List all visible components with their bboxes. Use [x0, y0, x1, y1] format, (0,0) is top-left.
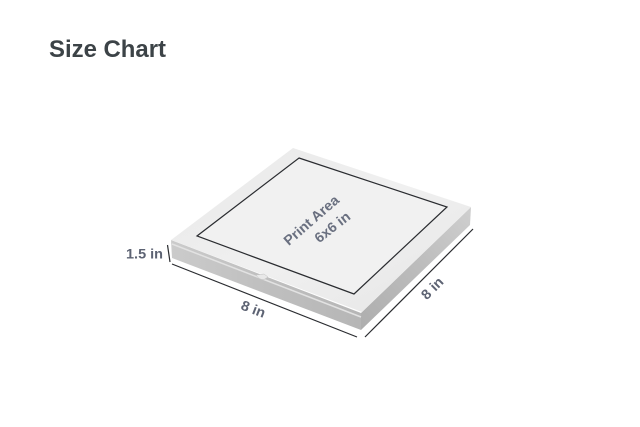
print area label: Print Area [280, 192, 342, 248]
print area size label: 6x6 in [311, 208, 353, 246]
print area outline [197, 158, 447, 294]
front width dimension line [172, 264, 357, 337]
box front face [171, 240, 361, 330]
box top face [171, 148, 471, 312]
height dimension line [168, 245, 170, 262]
lid lip highlight [172, 244, 361, 317]
height label: 1.5 in [126, 246, 163, 262]
title: Size Chart [49, 36, 166, 63]
box side face [361, 207, 471, 330]
box clasp [256, 274, 268, 280]
side depth label: 8 in [418, 274, 447, 303]
side depth dimension line [365, 229, 473, 337]
box illustration [171, 148, 471, 330]
front width label: 8 in [239, 297, 268, 321]
